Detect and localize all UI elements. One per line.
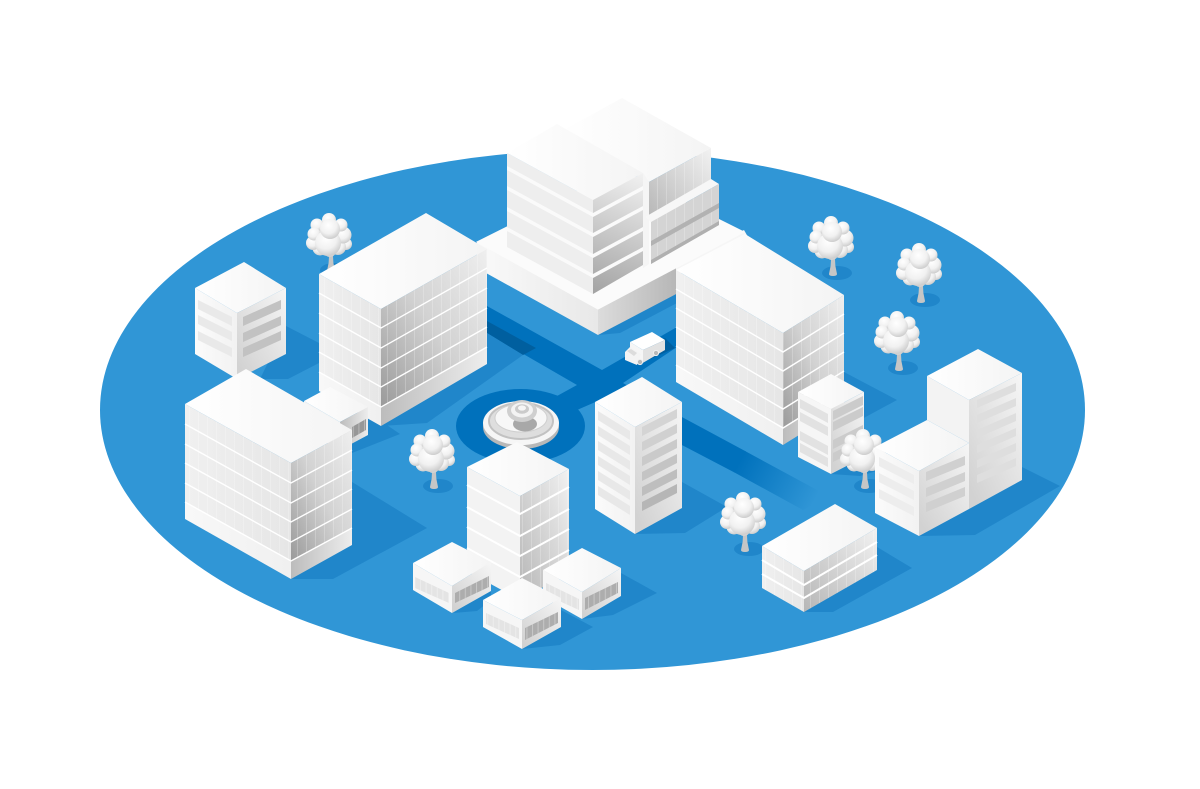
tree: lower centre-right [720,492,766,556]
tree: upper right one [808,216,854,280]
tree: left of fountain [409,429,455,493]
back tower [560,98,719,268]
building: L-shaped, right [875,349,1022,536]
small box: front [483,578,561,649]
fountain plaza ring [456,389,585,463]
building: large, lower left [185,369,352,579]
building: low connector [304,387,368,450]
building: tall, centre [595,377,682,534]
small box: left [413,542,491,613]
building shadows [260,270,1060,649]
ground disc [100,150,1085,670]
building: small mid-right [798,374,864,474]
platform [477,170,748,335]
front stepped tower [507,124,643,294]
tree: upper right two [896,243,942,307]
building: large, upper left [319,213,487,426]
building: low three-floor, lower right [762,504,877,612]
small box: right [543,548,621,619]
building: small cube, upper left [195,262,286,379]
building: stacked tower, centre front [467,442,569,600]
building: large, right of centre [676,234,844,445]
delivery truck [625,332,675,365]
road network [487,306,830,510]
tree: upper left [306,213,352,277]
main complex on platform [477,98,748,335]
fountain [483,400,559,449]
tree: beside small building [840,429,886,493]
tree: right three [874,311,920,375]
